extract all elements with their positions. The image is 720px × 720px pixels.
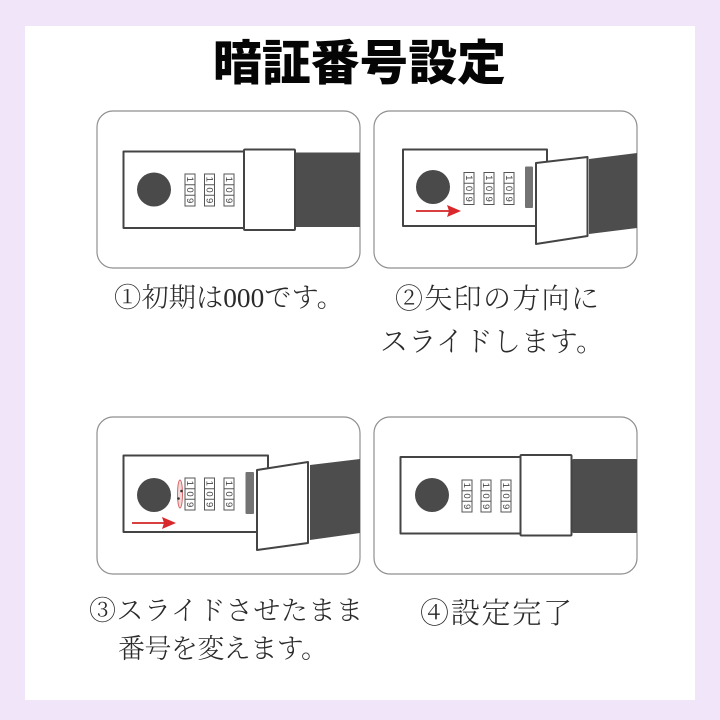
number wheels: 1 [204, 177, 214, 182]
number wheels: 9 [480, 504, 491, 509]
lock body [124, 152, 244, 228]
number wheels: 0 [461, 493, 472, 499]
number wheels: 9 [463, 197, 474, 202]
caption: step 2 [380, 283, 604, 358]
number wheels: 9 [184, 502, 195, 507]
caption: step 3: 番号を変えます。 [118, 634, 328, 664]
number wheels: 1 [503, 175, 514, 180]
lock body [124, 456, 268, 532]
strap [296, 152, 360, 227]
caption: step 2: スライドします。 [380, 327, 604, 358]
icon: red wheel rotation marker [177, 480, 183, 508]
strap [572, 459, 637, 533]
sliding sleeve [257, 462, 308, 550]
icon: round knob [415, 478, 449, 512]
number wheels: 0 [480, 493, 491, 499]
number wheels [184, 174, 234, 206]
number wheels: 9 [223, 502, 234, 507]
number wheels: 1 [483, 175, 494, 180]
number wheels: 0 [184, 491, 195, 497]
number wheels [184, 478, 234, 510]
caption: step 3 [89, 596, 363, 664]
number wheels: 9 [483, 197, 494, 202]
number wheels: 0 [204, 187, 214, 193]
lock body [400, 457, 522, 534]
lock body [403, 150, 547, 226]
exposed grey slot [525, 166, 533, 208]
strap [589, 153, 637, 234]
panel: step 2 lock diagram [374, 111, 637, 268]
panel: step 1 lock diagram [97, 111, 360, 268]
number wheels: 1 [204, 481, 214, 486]
arrow: slide right [132, 517, 176, 529]
caption: step 3: ③スライドさせたまま [89, 596, 363, 626]
number wheels: 0 [500, 493, 511, 499]
number wheels: 0 [503, 186, 514, 191]
number wheels: 1 [461, 483, 472, 488]
number wheels: 0 [483, 186, 494, 191]
caption: step 4: ④設定完了 [420, 597, 572, 630]
number wheels: 9 [500, 504, 511, 509]
number wheels: 9 [184, 198, 195, 203]
strap [310, 459, 360, 540]
number wheels: 1 [184, 177, 195, 182]
title: 暗証番号設定 [213, 38, 506, 90]
number wheels: 0 [463, 186, 474, 191]
number wheels: 0 [184, 187, 195, 193]
number wheels [463, 172, 514, 204]
number wheels: 1 [223, 177, 234, 182]
icon: round knob [137, 478, 171, 512]
number wheels [461, 480, 511, 512]
number wheels: 1 [184, 481, 195, 486]
sliding sleeve [520, 455, 572, 536]
number wheels: 9 [461, 504, 472, 509]
icon: round knob [137, 172, 171, 206]
sliding sleeve [244, 150, 295, 230]
number wheels: 9 [223, 198, 234, 203]
sliding sleeve [536, 157, 588, 244]
number wheels: 9 [204, 198, 214, 203]
arrow: slide right [416, 205, 461, 217]
number wheels: 0 [204, 491, 214, 497]
number wheels: 0 [223, 491, 234, 497]
number wheels: 9 [204, 502, 214, 507]
number wheels: 0 [223, 187, 234, 193]
panel: step 4 lock diagram [374, 417, 637, 574]
number wheels: 1 [223, 481, 234, 486]
caption: step 1: ①初期は000です。 [114, 283, 344, 313]
icon: round knob [416, 170, 450, 204]
panel: step 3 lock diagram [97, 417, 360, 574]
number wheels: 1 [480, 483, 491, 488]
number wheels: 9 [503, 197, 514, 202]
caption: step 2: ②矢印の方向に [395, 283, 599, 315]
exposed grey slot [246, 472, 254, 514]
number wheels: 1 [500, 483, 511, 488]
number wheels: 1 [463, 175, 474, 180]
